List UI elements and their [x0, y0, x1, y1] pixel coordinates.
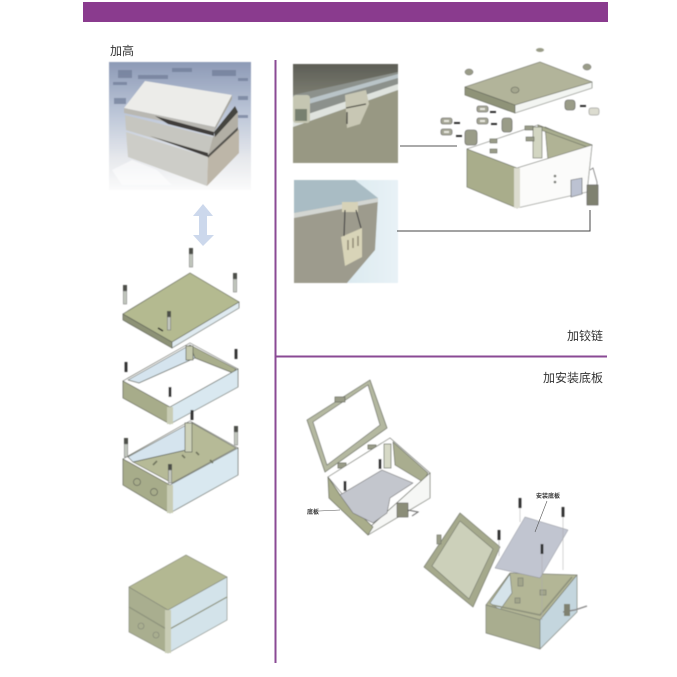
- heading: raise height: 加高: [110, 43, 134, 58]
- open lid frame: [307, 380, 387, 472]
- screws: [498, 498, 564, 554]
- label: mounting plate: 安装底板: [536, 492, 560, 500]
- lid: [424, 513, 500, 607]
- hinge parts: [441, 48, 599, 145]
- photo: hinge close-up: [293, 64, 398, 163]
- plate: [495, 517, 568, 578]
- frame: [123, 343, 238, 424]
- hinge lid: [465, 62, 592, 113]
- photo: stacked enclosure: [109, 62, 251, 190]
- base: [123, 421, 238, 513]
- plate screws: [344, 459, 381, 491]
- hinge box: [467, 125, 592, 208]
- box body: [328, 438, 430, 535]
- icon: double arrow: [193, 204, 214, 246]
- label: bottom plate: 底板: [307, 508, 319, 516]
- lid screws: [123, 248, 237, 330]
- plate: [340, 470, 413, 523]
- frame screws: [125, 349, 237, 420]
- heading: add hinge: 加铰链: [567, 328, 603, 343]
- lid: [123, 273, 239, 348]
- exploded raised enclosure diagram: [123, 248, 239, 653]
- photo: latch close-up: [294, 180, 398, 283]
- label: bottom plate: [307, 508, 340, 516]
- exploded hinge diagram: [441, 48, 599, 208]
- heading: add mounting plate: 加安装底板: [543, 370, 603, 385]
- label: mounting plate: [535, 492, 560, 532]
- base screws: [124, 426, 238, 483]
- assembled box: [129, 555, 227, 653]
- latch: [571, 168, 598, 205]
- connector line: latch: [397, 210, 590, 231]
- open box with mounting plate: [424, 498, 587, 649]
- connector line: hinge: [400, 145, 457, 147]
- box: [486, 573, 577, 649]
- horizontal divider: [275, 356, 607, 358]
- header bar: [83, 2, 608, 22]
- vertical divider: [274, 60, 276, 663]
- latch: [397, 503, 408, 517]
- open box with bottom plate: [307, 380, 430, 535]
